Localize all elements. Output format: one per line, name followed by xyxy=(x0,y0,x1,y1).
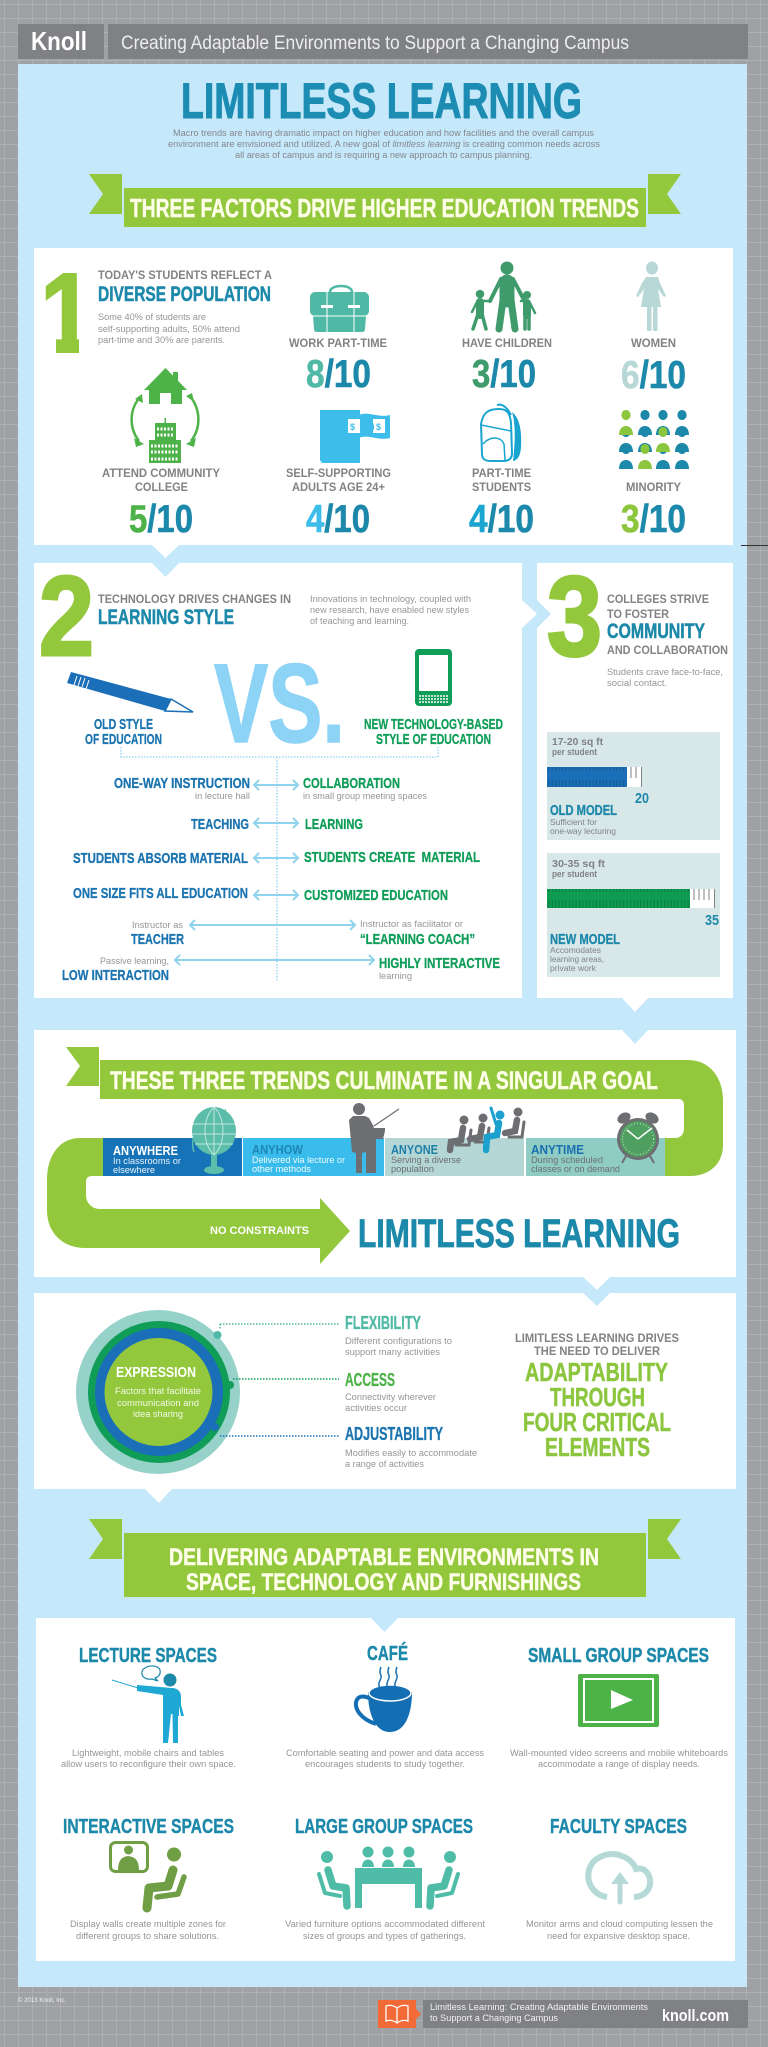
comparison: interaction xyxy=(62,956,500,984)
new model card: per student xyxy=(552,869,597,879)
comparison: teaching: LEARNING xyxy=(305,817,363,833)
space: small group: Wall-mounted video screens and mobile whiteboards xyxy=(510,1748,729,1758)
comparison arrows xyxy=(175,780,374,965)
stat: attend community college: ATTEND COMMUNITY xyxy=(102,468,220,480)
panel 5: adaptability xyxy=(34,1293,736,1503)
stat: women xyxy=(621,262,686,397)
concentric circles: communication and xyxy=(117,1398,199,1408)
comparison: interaction: learning xyxy=(379,971,412,981)
ribbon: delivering adaptable environments: DELIVERING ADAPTABLE ENVIRONMENTS IN xyxy=(169,1544,599,1571)
VS: VS. xyxy=(214,641,345,766)
space: interactive: Display walls create multiple zones for xyxy=(70,1919,226,1929)
strip: anyone: population xyxy=(391,1164,434,1174)
ribbon: three factors xyxy=(89,174,681,227)
intro text: all areas of campus and is requiring a new approach to campus planning. xyxy=(235,150,532,161)
comparison: teaching xyxy=(191,817,363,833)
footer bar: Limitless Learning: Creating Adaptable Environments xyxy=(430,2002,648,2013)
concentric circles: Factors that facilitate xyxy=(115,1386,201,1396)
panel 2: learning style xyxy=(34,553,537,998)
stat: minority: MINORITY xyxy=(626,482,681,494)
comparison: teacher: Instructor as facilitator or xyxy=(360,919,463,929)
stat: self-supporting adults xyxy=(286,410,391,541)
new style label xyxy=(364,717,503,748)
ribbon path xyxy=(47,1047,723,1264)
panel 1 heading: Some 40% of students are xyxy=(98,312,206,322)
old style label: OLD STYLE xyxy=(94,717,153,733)
icon: alarm clock xyxy=(615,1110,661,1163)
space: small group: SMALL GROUP SPACES xyxy=(528,1645,709,1667)
space: cafe xyxy=(286,1642,485,1769)
ribbon: delivering adaptable environments xyxy=(89,1519,681,1597)
comparison: material: STUDENTS CREATE MATERIAL xyxy=(304,850,480,866)
strip: anyhow: Delivered via lecture or xyxy=(252,1155,345,1165)
numeral 1: 1 xyxy=(40,250,94,376)
space: faculty: Monitor arms and cloud computing lessen the xyxy=(526,1919,713,1929)
comparison: interaction: HIGHLY INTERACTIVE xyxy=(379,956,500,972)
footer bar xyxy=(423,2000,748,2028)
panel 3 heading: COLLEGES STRIVE xyxy=(607,594,709,606)
space: large group: Varied furniture options accommodated different xyxy=(285,1919,486,1929)
new model card: private work xyxy=(550,963,597,973)
new model card: 35 xyxy=(705,913,719,929)
panel 3 heading: AND COLLABORATION xyxy=(607,645,728,657)
strip: anywhere: In classrooms or xyxy=(113,1156,181,1166)
stat: minority: 3/10 xyxy=(621,498,686,541)
stat: work part-time: 8/10 xyxy=(306,353,371,396)
strip: anytime: classes or on demand xyxy=(531,1164,620,1174)
stat: self-supporting adults: SELF-SUPPORTING xyxy=(286,468,391,480)
panel 3 heading: TO FOSTER xyxy=(607,609,670,621)
space: interactive: different groups to share solutions. xyxy=(76,1931,219,1941)
space: interactive: INTERACTIVE SPACES xyxy=(63,1816,234,1838)
panel 1 heading: part-time and 30% are parents. xyxy=(98,335,225,345)
old style label: OF EDUCATION xyxy=(85,732,162,748)
panel 2 intro: of teaching and learning. xyxy=(310,616,409,626)
element: access: Connectivity wherever xyxy=(345,1392,436,1402)
stat: self-supporting adults: 4/10 xyxy=(306,498,370,541)
panel 1 heading: self-supporting adults, 50% attend xyxy=(98,324,240,334)
panel 3: community xyxy=(537,553,733,1012)
concentric circles: idea sharing xyxy=(133,1409,183,1419)
icon: teacher at lectern xyxy=(349,1103,399,1173)
icon: phone xyxy=(415,649,452,706)
concentric circles: EXPRESSION xyxy=(116,1364,196,1381)
footer bar: knoll.com xyxy=(662,2006,729,2025)
space: small group xyxy=(510,1645,729,1769)
space: faculty: need for expansive desktop space. xyxy=(547,1931,690,1941)
arrow label: NO CONSTRAINTS xyxy=(210,1225,309,1237)
strip: anyhow: ANYHOW xyxy=(252,1143,303,1157)
comparison: instruction: in small group meeting spaces xyxy=(303,791,428,801)
element: flexibility: Different configurations to xyxy=(345,1336,452,1346)
space: cafe: encourages students to study together. xyxy=(305,1759,465,1769)
old model card: OLD MODEL xyxy=(550,803,617,819)
space: lecture: allow users to reconfigure their own space. xyxy=(61,1759,236,1769)
adaptability statement: LIMITLESS LEARNING DRIVES xyxy=(515,1333,679,1345)
stat: part-time students: STUDENTS xyxy=(472,482,531,494)
strip: anyhow: other methods xyxy=(252,1164,311,1174)
adaptability statement: THE NEED TO DELIVER xyxy=(534,1346,661,1358)
stat: women: 6/10 xyxy=(621,354,686,397)
stat: self-supporting adults: $ xyxy=(350,422,355,432)
comparison: material xyxy=(73,850,480,867)
icon: pencil xyxy=(67,672,193,712)
old model card: 20 xyxy=(635,791,649,807)
stat: minority xyxy=(619,410,689,541)
new model card: 30-35 sq ft xyxy=(552,858,606,870)
panel 3 heading xyxy=(607,594,728,688)
comparison: interaction: LOW INTERACTION xyxy=(62,968,169,984)
space: cafe: CAFÉ xyxy=(367,1642,408,1665)
new model card: Accomodates xyxy=(550,945,601,955)
panel 4: singular goal xyxy=(34,1030,736,1290)
numeral 2: 2 xyxy=(39,553,94,679)
comparison: instruction xyxy=(114,776,428,801)
comparison: teacher: TEACHER xyxy=(131,932,184,948)
comparison: education xyxy=(73,886,448,904)
stat: self-supporting adults: ADULTS AGE 24+ xyxy=(292,482,385,494)
adaptability statement: ADAPTABILITY xyxy=(525,1357,668,1387)
comparison: teaching: TEACHING xyxy=(191,817,249,833)
element: access: ACCESS xyxy=(345,1370,395,1390)
comparison: interaction: Passive learning, xyxy=(100,956,169,966)
header bar: Knoll xyxy=(31,26,87,56)
panel 2 heading xyxy=(98,594,291,629)
element: access: activities occur xyxy=(345,1403,407,1413)
old style label xyxy=(85,717,162,748)
stat: part-time students: PART-TIME xyxy=(472,468,531,480)
comparison: instruction: in lecture hall xyxy=(195,791,250,801)
comparison: teacher: Instructor as xyxy=(132,920,184,930)
panel 1 heading: TODAY'S STUDENTS REFLECT A xyxy=(98,270,272,282)
adaptability statement: THROUGH xyxy=(550,1382,645,1412)
panel 3 heading: Students crave face-to-face, xyxy=(607,667,723,677)
icon: seated students xyxy=(450,1108,524,1150)
new model card: learning areas, xyxy=(550,954,604,964)
stat: have children: HAVE CHILDREN xyxy=(462,338,552,350)
icon: orange book xyxy=(378,2000,421,2028)
intro text: Macro trends are having dramatic impact on higher education and how facilities and the overall campus xyxy=(173,128,594,139)
strip: anytime: ANYTIME xyxy=(531,1143,584,1157)
panel 1 heading: DIVERSE POPULATION xyxy=(98,282,271,306)
element: access xyxy=(345,1370,436,1413)
element: flexibility: FLEXIBILITY xyxy=(345,1313,421,1333)
element: adjustability: a range of activities xyxy=(345,1459,425,1469)
panel 2 intro: Innovations in technology, coupled with xyxy=(310,594,471,604)
space: large group: LARGE GROUP SPACES xyxy=(295,1816,473,1838)
panel 2 intro: new research, have enabled new styles xyxy=(310,605,470,615)
strip: anytime xyxy=(526,1138,665,1176)
space: large group xyxy=(285,1816,486,1941)
strip: anyhow xyxy=(243,1138,384,1176)
strip: anyone: Serving a diverse xyxy=(391,1155,461,1165)
adaptability statement: ELEMENTS xyxy=(545,1432,650,1462)
new model card xyxy=(547,853,720,977)
numeral 3: 3 xyxy=(547,553,602,679)
space: faculty: FACULTY SPACES xyxy=(550,1816,687,1838)
old model card: per student xyxy=(552,747,597,757)
title: LIMITLESS LEARNING xyxy=(181,73,582,129)
space: large group: sizes of groups and types of gatherings. xyxy=(303,1931,466,1941)
old model card: 17-20 sq ft xyxy=(552,736,603,748)
concentric circles xyxy=(76,1310,240,1474)
comparison: education: CUSTOMIZED EDUCATION xyxy=(304,888,448,904)
header bar: Creating Adaptable Environments to Support a Changing Campus xyxy=(121,33,629,54)
old model card: Sufficient for xyxy=(550,817,597,827)
new style label: STYLE OF EDUCATION xyxy=(376,732,491,748)
panel 7: spaces xyxy=(36,1618,735,1961)
panel 2 heading: LEARNING STYLE xyxy=(98,606,234,629)
strip: anyone xyxy=(385,1138,524,1176)
stat: attend community college: 5/10 xyxy=(129,498,193,541)
intro text: environment are envisioned and utilized. A new goal of limitless learning is creating common needs across xyxy=(168,139,600,150)
ribbon: delivering adaptable environments: SPACE, TECHNOLOGY AND FURNISHINGS xyxy=(186,1569,581,1596)
copyright: © 2013 Knoll, Inc. xyxy=(18,1997,66,2004)
strip: anyone: ANYONE xyxy=(391,1143,438,1157)
panel 2 heading: TECHNOLOGY DRIVES CHANGES IN xyxy=(98,594,291,606)
element: adjustability: Modifies easily to accommodate xyxy=(345,1448,477,1458)
panel 3 heading: COMMUNITY xyxy=(607,620,705,643)
stat: part-time students xyxy=(469,405,534,541)
comparison: teacher: “LEARNING COACH” xyxy=(360,932,475,948)
new model card: NEW MODEL xyxy=(550,932,620,948)
strip: anywhere: ANYWHERE xyxy=(113,1144,178,1158)
adaptability statement xyxy=(515,1333,679,1462)
intro text xyxy=(168,128,600,161)
stat: women: WOMEN xyxy=(631,338,676,350)
comparison: education: ONE SIZE FITS ALL EDUCATION xyxy=(73,886,248,902)
old model card: one-way lecturing xyxy=(550,826,616,836)
stat: have children xyxy=(462,262,552,396)
element: adjustability xyxy=(345,1424,477,1469)
panel 1: diverse population xyxy=(34,248,733,558)
space: faculty xyxy=(526,1816,713,1941)
stat: self-supporting adults: $ xyxy=(376,422,381,432)
icon: globe xyxy=(192,1107,236,1174)
element: flexibility xyxy=(345,1313,452,1357)
footer bar: to Support a Changing Campus xyxy=(430,2013,558,2024)
space: interactive xyxy=(63,1816,234,1941)
stat: work part-time: WORK PART-TIME xyxy=(289,338,387,350)
stat: work part-time xyxy=(289,286,387,396)
header bar xyxy=(18,24,748,59)
old model card xyxy=(547,732,720,840)
space: cafe: Comfortable seating and power and data access xyxy=(286,1748,485,1758)
element: adjustability: ADJUSTABILITY xyxy=(345,1424,443,1444)
strip: anywhere: elsewhere xyxy=(113,1165,155,1175)
new style label: NEW TECHNOLOGY-BASED xyxy=(364,717,503,733)
panel 3 heading: social contact. xyxy=(607,678,667,688)
stat: attend community college: COLLEGE xyxy=(135,482,188,494)
comparison: teacher xyxy=(131,919,475,948)
comparison: instruction: COLLABORATION xyxy=(303,776,400,792)
panel 1 heading xyxy=(98,270,272,345)
panel 2 intro xyxy=(310,594,471,626)
space: small group: accommodate a range of display needs. xyxy=(538,1759,700,1769)
space: lecture xyxy=(61,1645,236,1769)
space: lecture: LECTURE SPACES xyxy=(79,1645,217,1667)
element: flexibility: support many activities xyxy=(345,1347,441,1357)
comparison: material: STUDENTS ABSORB MATERIAL xyxy=(73,851,248,867)
adaptability statement: FOUR CRITICAL xyxy=(523,1407,671,1437)
stat: attend community college xyxy=(102,368,220,541)
stat: have children: 3/10 xyxy=(472,353,536,396)
strip: anytime: During scheduled xyxy=(531,1155,603,1165)
strip: anywhere xyxy=(103,1138,242,1176)
comparison: instruction: ONE-WAY INSTRUCTION xyxy=(114,776,250,792)
stat: part-time students: 4/10 xyxy=(469,498,534,541)
space: lecture: Lightweight, mobile chairs and tables xyxy=(72,1748,225,1758)
